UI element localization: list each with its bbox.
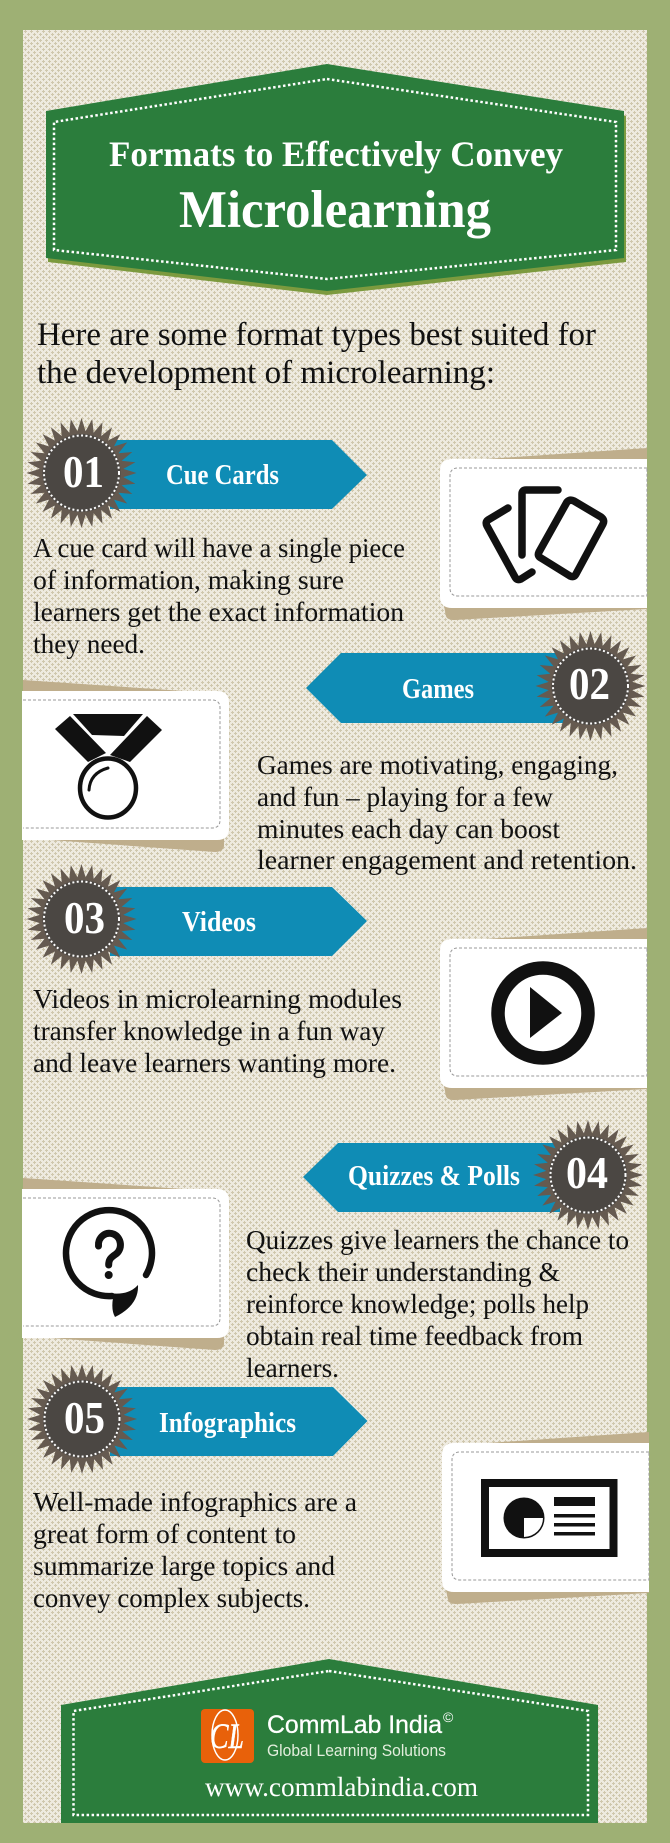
card 04	[22, 1178, 229, 1350]
body 02: minutes each day can boost	[257, 814, 560, 844]
ribbon 05	[110, 1387, 368, 1456]
ribbon 01	[110, 440, 367, 509]
intro text: Here are some format types best suited for	[37, 317, 596, 353]
icon: cards	[486, 490, 604, 580]
body 01	[33, 533, 405, 659]
body 01: learners get the exact information	[33, 597, 405, 627]
badge 05	[27, 1364, 137, 1474]
body 01: A cue card will have a single piece	[33, 533, 405, 563]
card 03	[440, 928, 647, 1100]
body 04: reinforce knowledge; polls help	[246, 1289, 589, 1319]
section 03: videos	[26, 864, 647, 1100]
ribbon 02	[306, 653, 565, 723]
card 05	[442, 1432, 649, 1604]
body 03: Videos in microlearning modules	[33, 984, 402, 1014]
number 04: 04	[566, 1147, 608, 1198]
body 02: learner engagement and retention.	[257, 845, 637, 875]
footer banner	[61, 1659, 598, 1823]
card 02	[22, 680, 229, 852]
body 02	[257, 750, 637, 875]
tagline: Global Learning Solutions	[267, 1741, 446, 1760]
body 05	[33, 1487, 357, 1613]
body 03: transfer knowledge in a fun way	[33, 1016, 385, 1046]
brand name: CommLab India	[267, 1711, 442, 1739]
card 01	[440, 448, 647, 620]
icon: infographic	[485, 1483, 614, 1553]
icon: medal	[55, 714, 162, 818]
body 02: Games are motivating, engaging,	[257, 750, 618, 780]
body 04: Quizzes give learners the chance to	[246, 1225, 629, 1255]
badge 04	[533, 1120, 643, 1230]
heading quizzes: Quizzes & Polls	[348, 1161, 520, 1192]
ribbon 04	[303, 1143, 560, 1212]
body 01: of information, making sure	[33, 565, 344, 595]
number 01: 01	[63, 446, 104, 497]
website: www.commlabindia.com	[205, 1772, 478, 1802]
copyright mark: ©	[443, 1709, 454, 1725]
body 05: great form of content to	[33, 1519, 296, 1549]
body 05: summarize large topics and	[33, 1551, 336, 1581]
body 04: learners.	[246, 1353, 339, 1383]
ribbon 03	[110, 887, 367, 956]
icon: play	[498, 968, 588, 1058]
body 02: and fun – playing for a few	[257, 782, 554, 812]
number 05: 05	[64, 1392, 105, 1443]
badge 02	[536, 631, 646, 741]
heading videos: Videos	[182, 907, 256, 938]
title line 1: Formats to Effectively Convey	[109, 134, 563, 174]
heading cue cards: Cue Cards	[166, 460, 279, 491]
body 01: they need.	[33, 629, 145, 659]
badge 01	[26, 418, 136, 528]
intro text	[37, 317, 596, 391]
body 04: check their understanding &	[246, 1257, 560, 1287]
body 04: obtain real time feedback from	[246, 1321, 583, 1351]
heading infographics: Infographics	[159, 1408, 296, 1439]
icon: question bubble	[66, 1210, 152, 1317]
body 03	[33, 984, 402, 1078]
heading games: Games	[402, 674, 474, 705]
section 04: quizzes and polls	[22, 1120, 643, 1383]
number 03: 03	[64, 892, 105, 943]
section 01: cue cards	[26, 418, 647, 659]
logo: CL	[210, 1716, 244, 1756]
logo	[201, 1709, 254, 1763]
section 05: infographics	[27, 1364, 649, 1613]
title banner	[46, 64, 626, 295]
section 02: games	[22, 631, 646, 875]
body 05: convey complex subjects.	[33, 1583, 310, 1613]
body 05: Well-made infographics are a	[33, 1487, 357, 1517]
number 02: 02	[569, 658, 610, 709]
body 04	[246, 1225, 629, 1383]
body 03: and leave learners wanting more.	[33, 1048, 396, 1078]
title line 2: Microlearning	[179, 181, 491, 239]
intro text: the development of microlearning:	[37, 355, 495, 391]
badge 03	[26, 864, 136, 974]
